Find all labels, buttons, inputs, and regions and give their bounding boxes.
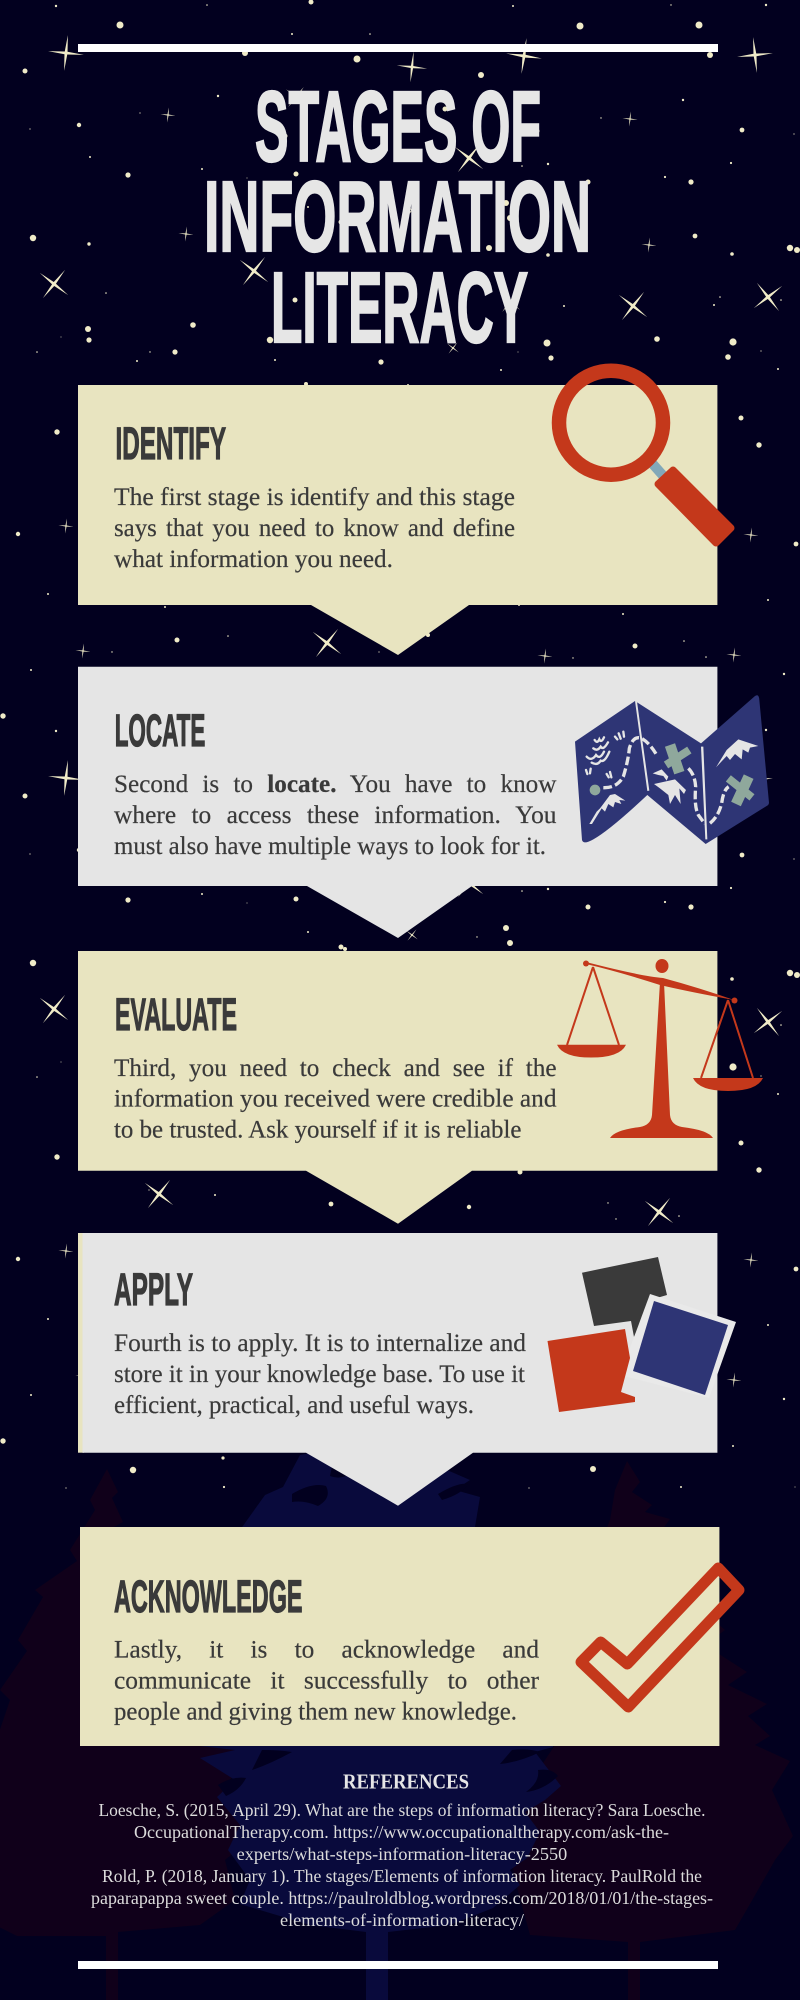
background tree: right silhouette <box>505 1461 793 2000</box>
body text <box>114 1053 557 1144</box>
body text: communicate it successfully to other <box>114 1666 539 1695</box>
bottom bar <box>78 1961 718 1969</box>
references list <box>91 1800 713 1930</box>
body text: to be trusted. Ask yourself if it is reliable <box>114 1115 522 1144</box>
body text <box>114 1635 539 1726</box>
panel shape <box>78 667 717 938</box>
body text <box>114 1328 526 1419</box>
references list: OccupationalTherapy.com. https://www.occupationaltherapy.com/ask-the- <box>134 1822 669 1842</box>
background tree: centre navy silhouette <box>200 1440 561 2000</box>
map marker <box>590 785 600 795</box>
panel shape <box>82 1233 717 1506</box>
title <box>204 71 591 364</box>
heading: evaluate: EVALUATE <box>115 989 237 1040</box>
heading: identify: IDENTIFY <box>116 418 226 469</box>
heading: acknowledge: ACKNOWLEDGE <box>114 1571 302 1622</box>
icon: check mark <box>581 1568 739 1707</box>
top bar <box>78 44 718 52</box>
references list: experts/what-steps-information-literacy-2550 <box>237 1844 567 1864</box>
references list: paparapappa sweet couple. https://paulroldblog.wordpress.com/2018/01/01/the-stages- <box>91 1888 713 1908</box>
title: LITERACY <box>271 252 528 364</box>
body text: The first stage is identify and this stage <box>114 482 515 511</box>
references <box>91 1770 713 1930</box>
icon: magnifying glass <box>559 371 731 543</box>
body text: Second is to locate. You have to know <box>114 769 557 798</box>
icon: speech bubbles <box>548 1257 736 1412</box>
body text: store it in your knowledge base. To use it <box>114 1359 525 1388</box>
body text: says that you need to know and define <box>114 513 515 542</box>
body text: must also have multiple ways to look for it. <box>114 831 546 860</box>
references list: elements-of-information-literacy/ <box>280 1910 524 1930</box>
panel: locate: LOCATE <box>115 705 205 756</box>
icon: balance scale <box>557 959 763 1138</box>
body text: Fourth is to apply. It is to internalize and <box>114 1328 526 1357</box>
references heading: REFERENCES <box>343 1770 469 1794</box>
body text: people and giving them new knowledge. <box>114 1697 517 1726</box>
background tree: left silhouette <box>0 1469 250 2000</box>
references list: Rold, P. (2018, January 1). The stages/Elements of information literacy. PaulRold the <box>102 1866 702 1887</box>
panel: acknowledge <box>80 1527 739 1746</box>
panel: locate <box>78 667 769 938</box>
background stars <box>0 0 800 1489</box>
body text: efficient, practical, and useful ways. <box>114 1390 474 1419</box>
body text: what information you need. <box>114 544 393 573</box>
panel shape <box>78 385 717 655</box>
body text: Lastly, it is to acknowledge and <box>114 1635 539 1664</box>
panel: evaluate <box>78 951 763 1224</box>
panel shape <box>80 1527 719 1746</box>
panel: apply <box>78 1233 736 1506</box>
body text: where to access these information. You <box>114 800 557 829</box>
body text: Third, you need to check and see if the <box>114 1053 556 1082</box>
panel cream edge <box>78 1233 84 1453</box>
icon: folded map <box>575 695 769 844</box>
body text: information you received were credible and <box>114 1084 557 1113</box>
heading: apply: APPLY <box>114 1264 193 1315</box>
body text <box>114 769 557 860</box>
panel: identify <box>78 371 731 655</box>
references list: Loesche, S. (2015, April 29). What are the steps of information literacy? Sara Loesche. <box>98 1800 706 1821</box>
panel shape <box>78 951 717 1224</box>
body text <box>114 482 515 573</box>
